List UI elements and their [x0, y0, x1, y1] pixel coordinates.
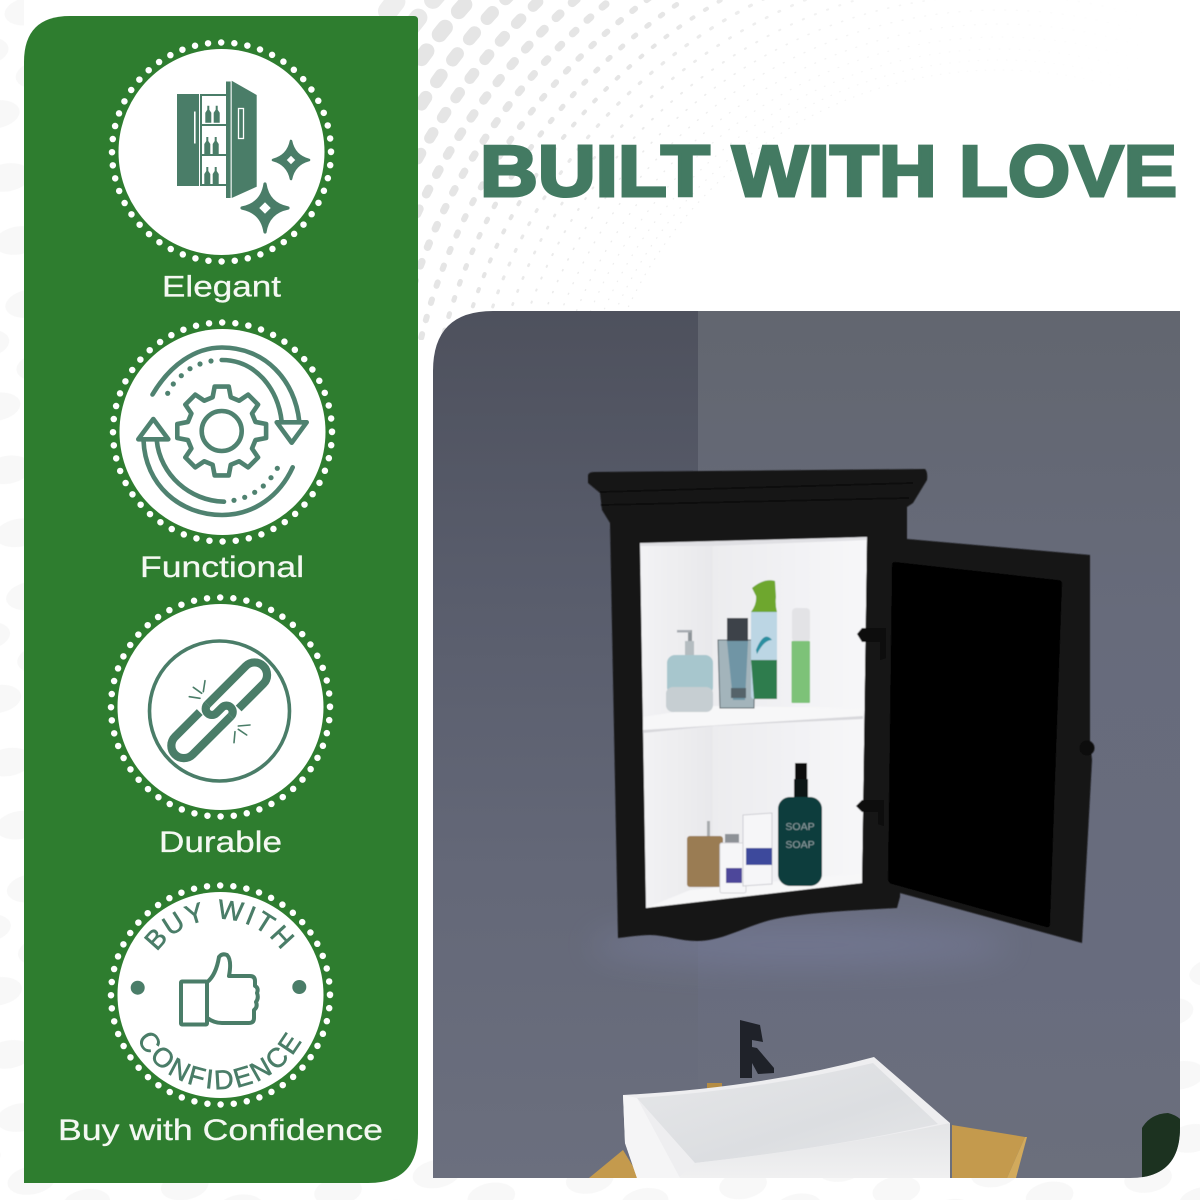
- cabinet: middle shelf: [642, 706, 753, 730]
- product: stone soap dispenser: [687, 821, 723, 887]
- icon: dotted arc accents: [165, 358, 280, 503]
- product: glass soap dispenser: [666, 630, 713, 712]
- photo: right wall: [698, 311, 1180, 1178]
- seal text: BUY WITH: BUY WITH: [144, 899, 295, 950]
- label: Durable: Durable: [159, 826, 282, 859]
- seal text: CONFIDENCE: CONFIDENCE: [140, 1032, 302, 1090]
- panel: bathroom product photo: [433, 311, 1185, 1180]
- photo: white sink: [623, 1057, 950, 1178]
- label: Elegant: Elegant: [162, 270, 282, 304]
- label: Buy with Confidence: Buy with Confidence: [58, 1114, 383, 1147]
- product: dark green soap bottle: [778, 763, 822, 886]
- icon: open cabinet with sparkles: [177, 81, 309, 232]
- product: green spray bottle: [792, 608, 810, 703]
- photo: faucet: [740, 1020, 774, 1078]
- cabinet: interior back walls: [640, 543, 713, 908]
- panel: green benefits sidebar: [24, 16, 418, 1183]
- product: white lotion bottle: [720, 834, 746, 893]
- cabinet: hinges: [856, 628, 886, 826]
- cabinet: open door with mirror: [862, 536, 1094, 943]
- badge: Durable: [111, 598, 330, 859]
- title: BUILT WITH LOVE: [480, 132, 1177, 212]
- icon: thumbs up: [181, 954, 258, 1024]
- badge: Elegant: [112, 42, 331, 304]
- product: perfume bottle: [718, 618, 755, 708]
- cabinet: bottom floor: [646, 882, 862, 909]
- badge: Buy with Confidence: [108, 882, 334, 1108]
- cabinet: body and crown: [588, 469, 1094, 943]
- photo: left wall: [433, 311, 698, 1178]
- product: air freshener can: [751, 580, 777, 699]
- photo: wooden vanity: [589, 1083, 1027, 1178]
- icon: chain link in ring: [150, 641, 290, 781]
- product: dark green soap bottle: SOAP: [785, 839, 815, 851]
- product: dark green soap bottle: SOAP: [785, 821, 815, 833]
- seal dots: [131, 980, 306, 995]
- product: cream box: [743, 813, 772, 886]
- icon: small sparkle: [273, 141, 309, 179]
- badge: Functional: [113, 322, 332, 584]
- label: Functional: Functional: [140, 551, 304, 584]
- photo: plant leaf: [1142, 1113, 1180, 1178]
- icon: spark lines: [189, 681, 250, 743]
- icon: gear with cycle arrows: [138, 348, 307, 515]
- icon: large sparkle: [242, 184, 288, 232]
